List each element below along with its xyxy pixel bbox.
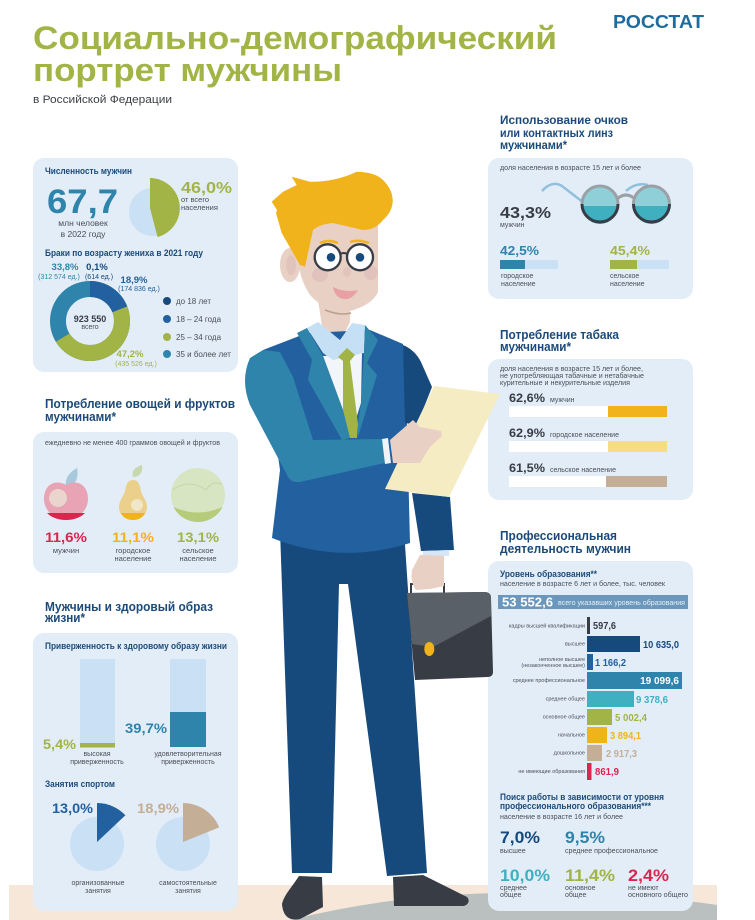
bar chart: education levels: 5 002,4 xyxy=(615,713,647,724)
panel: fruit and vegetables xyxy=(33,432,238,573)
stat: secondary professional: среднее профессиональное xyxy=(565,848,658,855)
number: population: в 2022 году xyxy=(61,229,106,239)
stat: basic general: общее xyxy=(565,891,586,899)
bar chart: education levels: неполное высшее xyxy=(539,657,585,663)
bar: men tobacco: мужчин xyxy=(550,397,575,404)
panel: glasses: доля населения в возрасте 15 лет и более xyxy=(500,164,641,172)
bar chart: education levels: дошкольное xyxy=(554,750,585,756)
stat: 46 percent: 46,0% xyxy=(181,180,232,197)
panel: fruit and vegetables: ежедневно не менее 400 граммов овощей и фруктов xyxy=(45,439,220,447)
far sleeve, upper xyxy=(403,345,432,425)
donut labels xyxy=(38,262,160,368)
title: Социально-демографический xyxy=(33,20,557,56)
glasses on face xyxy=(315,244,373,270)
stat: rural glasses: сельское xyxy=(610,273,639,280)
lapels xyxy=(297,325,378,440)
heading: fruit and vegetables xyxy=(45,397,235,424)
stat: secondary professional: 9,5% xyxy=(565,828,605,847)
bar chart: education levels: 861,9 xyxy=(595,767,619,778)
total education banner xyxy=(498,594,688,610)
description: доля населения в возрасте 15 лет и более, xyxy=(500,365,643,373)
legend xyxy=(163,297,231,359)
heading: healthy lifestyle: Мужчины и здоровый образ xyxy=(45,600,213,614)
stat: secondary general: 10,0% xyxy=(500,866,550,885)
stat: urban glasses: население xyxy=(501,281,536,288)
legend: 25 – 34 года xyxy=(176,333,222,342)
donut labels: (614 ед.) xyxy=(85,274,113,281)
subtitle: в Российской Федерации xyxy=(33,94,172,106)
bar: satisfactory adherence: 39,7% xyxy=(125,720,168,736)
total education banner: всего указавших уровень образования xyxy=(558,599,685,607)
stat: basic general: основное xyxy=(565,885,596,892)
heading: glasses: мужчинами* xyxy=(500,138,567,152)
jacket xyxy=(263,330,410,553)
donut labels: 0,1% xyxy=(86,262,108,273)
floor band xyxy=(9,885,717,920)
bar chart: education levels: высшее xyxy=(565,642,585,648)
panel: glasses xyxy=(488,158,693,299)
pie: independent sport: 18,9% xyxy=(137,800,180,816)
stat: higher: 7,0% xyxy=(500,828,540,847)
description: курительные и некурительные изделия xyxy=(500,380,630,387)
heading: job search xyxy=(500,792,664,821)
stat: men: 11,6% xyxy=(45,529,88,545)
bar chart: education levels: 19 099,6 xyxy=(640,676,679,687)
stat: men glasses xyxy=(500,205,551,229)
number: population: 67,7 xyxy=(47,183,118,221)
heading: job search: население в возрасте 16 лет и более xyxy=(500,813,623,821)
heading: professional activity xyxy=(500,529,631,556)
heading: tobacco: мужчинами* xyxy=(500,340,571,354)
pie: independent sport: занятия xyxy=(175,888,201,895)
heading: education xyxy=(500,569,666,588)
stat: no basic education: 2,4% xyxy=(628,866,669,885)
bar: high adherence: приверженность xyxy=(70,759,124,766)
cuff xyxy=(382,438,391,464)
heading: glasses xyxy=(500,113,628,152)
stat: higher: высшее xyxy=(500,848,526,855)
bar chart: education levels: 1 166,2 xyxy=(595,658,626,669)
icon: cabbage xyxy=(171,468,225,522)
heading: professional activity: деятельность мужчин xyxy=(500,542,631,556)
panel: professional activity xyxy=(488,561,693,911)
heading: tobacco xyxy=(500,328,620,354)
pie: organised sport: организованные xyxy=(71,880,125,887)
stat: rural glasses xyxy=(610,244,669,288)
bar: high adherence: 5,4% xyxy=(43,736,77,752)
hand with briefcase xyxy=(412,555,444,590)
heading: marriages: Браки по возрасту жениха в 2021 году xyxy=(45,248,203,258)
heading: healthy lifestyle xyxy=(44,600,213,625)
bar chart: education levels: 10 635,0 xyxy=(643,640,679,651)
donut chart: marriages by age xyxy=(58,289,122,353)
bar: satisfactory adherence xyxy=(125,659,222,766)
stat: no basic education xyxy=(628,866,688,899)
heading: glasses: Использование очков xyxy=(500,113,628,127)
logo: Росстат: РОССТАТ xyxy=(613,12,704,32)
total education banner: 53 552,6 xyxy=(502,594,553,610)
heading: job search: Поиск работы в зависимости от уровня xyxy=(500,792,664,802)
donut labels: 47,2% xyxy=(117,349,144,360)
tie xyxy=(338,348,358,438)
stat: rural: население xyxy=(179,554,217,563)
pie: organised sport: 13,0% xyxy=(52,800,94,816)
stat: urban glasses: 42,5% xyxy=(500,244,539,258)
bar chart: education levels: начальное xyxy=(558,732,585,738)
bar: high adherence: высокая xyxy=(83,751,111,758)
stat: urban glasses xyxy=(500,244,558,288)
near arm xyxy=(245,350,385,482)
bar chart: education levels: среднее общее xyxy=(546,696,585,702)
stat: men xyxy=(45,529,88,555)
paper xyxy=(385,386,500,497)
stat: secondary professional xyxy=(565,828,658,855)
bar: rural tobacco: 61,5% xyxy=(509,461,545,475)
bar: men tobacco: 62,6% xyxy=(509,391,545,405)
bar chart: education levels: 3 894,1 xyxy=(610,731,641,742)
bar chart: education levels: (незаконченное высшее) xyxy=(521,663,585,669)
heading: healthy lifestyle: жизни* xyxy=(44,611,85,625)
heading: fruit and vegetables: мужчинами* xyxy=(45,410,116,424)
icon: apple xyxy=(44,468,88,520)
icon: pear xyxy=(119,465,147,520)
bar chart: education levels: кадры высшей квалификации xyxy=(509,622,585,630)
bar: rural tobacco xyxy=(509,461,667,487)
stat: 46 percent: от всего xyxy=(181,195,209,204)
bar chart: education levels: не имеющие образования xyxy=(518,769,585,775)
heading: male population: Численность мужчин xyxy=(45,166,132,176)
pie: independent sport: самостоятельные xyxy=(159,880,217,887)
stat: secondary general xyxy=(500,866,550,899)
neck and ear xyxy=(280,248,350,342)
donut labels: 33,8% xyxy=(52,262,79,273)
stat: men glasses: мужчин xyxy=(500,222,525,229)
stat: urban: население xyxy=(114,554,152,563)
stat: rural glasses: население xyxy=(610,281,645,288)
stat: 46 percent xyxy=(181,180,232,212)
pie: organised sport xyxy=(52,800,125,895)
heading: professional activity: Профессиональная xyxy=(500,529,617,543)
trousers xyxy=(280,530,427,876)
stat: urban xyxy=(112,529,155,563)
legend: 35 и более лет xyxy=(176,350,231,359)
donut chart: marriages by age: 923 550 xyxy=(74,314,106,324)
icon: glasses xyxy=(542,184,670,224)
shirt xyxy=(307,322,365,438)
heading: job search: профессионального образования*** xyxy=(500,801,651,811)
stat: urban: городское xyxy=(116,546,150,555)
title xyxy=(33,20,557,88)
stat: men glasses: 43,3% xyxy=(500,205,551,222)
title: портрет мужчины xyxy=(33,52,342,88)
heading: education: население в возрасте 6 лет и более, тыс. человек xyxy=(500,580,666,588)
legend: до 18 лет xyxy=(176,297,211,306)
shoes xyxy=(282,875,469,919)
stat: 46 percent: населения xyxy=(181,203,218,212)
bar: satisfactory adherence: приверженность xyxy=(161,759,215,766)
bar: rural tobacco: сельское население xyxy=(550,467,616,474)
stat: basic general: 11,4% xyxy=(565,866,615,885)
description: не употребляющая табачные и нетабачные xyxy=(500,372,644,380)
donut labels: (174 836 ед.) xyxy=(118,286,160,293)
donut labels: 18,9% xyxy=(121,275,148,286)
stat: higher xyxy=(500,828,540,855)
head xyxy=(286,220,378,314)
bar chart: education levels: 2 917,3 xyxy=(606,749,637,760)
pie: independent sport xyxy=(137,800,219,895)
heading: fruit and vegetables: Потребление овощей и фруктов xyxy=(45,397,235,411)
stat: secondary general: среднее xyxy=(500,885,527,892)
stat: no basic education: основного общего xyxy=(628,891,688,899)
heading: adherence: Приверженность к здоровому образу жизни xyxy=(45,641,227,651)
bar: high adherence xyxy=(43,659,124,766)
bar: men tobacco xyxy=(509,391,667,417)
bar chart: education levels: среднее профессиональное xyxy=(513,678,585,684)
heading: education: Уровень образования** xyxy=(500,569,597,579)
eyebrows xyxy=(320,241,369,243)
stat: urban glasses: городское xyxy=(501,273,534,280)
panel: healthy lifestyle xyxy=(33,633,238,911)
stat: basic general xyxy=(565,866,615,899)
description xyxy=(500,365,644,387)
stat: secondary general: общее xyxy=(500,891,521,899)
panel: tobacco xyxy=(488,359,693,500)
hand pointing xyxy=(390,420,442,463)
donut labels: (435 526 ед.) xyxy=(115,361,157,368)
heading: glasses: или контактных линз xyxy=(500,126,613,140)
legend: 18 – 24 года xyxy=(176,315,222,324)
illustration: man with briefcase xyxy=(245,172,500,919)
hair xyxy=(272,172,393,267)
bar: urban tobacco: городское население xyxy=(550,432,619,439)
bar: satisfactory adherence: удовлетворительная xyxy=(154,751,222,758)
bar chart: education levels: основное общее xyxy=(543,714,585,720)
stat: men: мужчин xyxy=(53,546,79,555)
donut chart: marriages by age: всего xyxy=(81,324,99,331)
sleeve, far arm xyxy=(412,493,454,556)
donut labels: (312 574 ед.) xyxy=(38,274,80,281)
number: population xyxy=(47,183,118,239)
pie: organised sport: занятия xyxy=(85,888,111,895)
stat: rural xyxy=(177,529,220,563)
bar: urban tobacco xyxy=(509,426,667,452)
bar chart: education levels xyxy=(509,617,682,780)
stat: rural glasses: 45,4% xyxy=(610,244,650,258)
briefcase xyxy=(407,584,493,680)
heading: sport: Занятия спортом xyxy=(45,779,115,789)
pie: share of population xyxy=(129,178,180,237)
bar chart: education levels: 597,6 xyxy=(593,621,616,632)
stat: rural: сельское xyxy=(182,546,214,555)
bar: urban tobacco: 62,9% xyxy=(509,426,545,440)
bar chart: education levels: 9 378,6 xyxy=(636,695,668,706)
stat: urban: 11,1% xyxy=(112,529,155,545)
panel: male population and marriages xyxy=(33,158,238,372)
stat: rural: 13,1% xyxy=(177,529,220,545)
number: population: млн человек xyxy=(58,218,108,228)
stat: no basic education: не имеют xyxy=(628,885,659,892)
heading: tobacco: Потребление табака xyxy=(500,328,620,342)
